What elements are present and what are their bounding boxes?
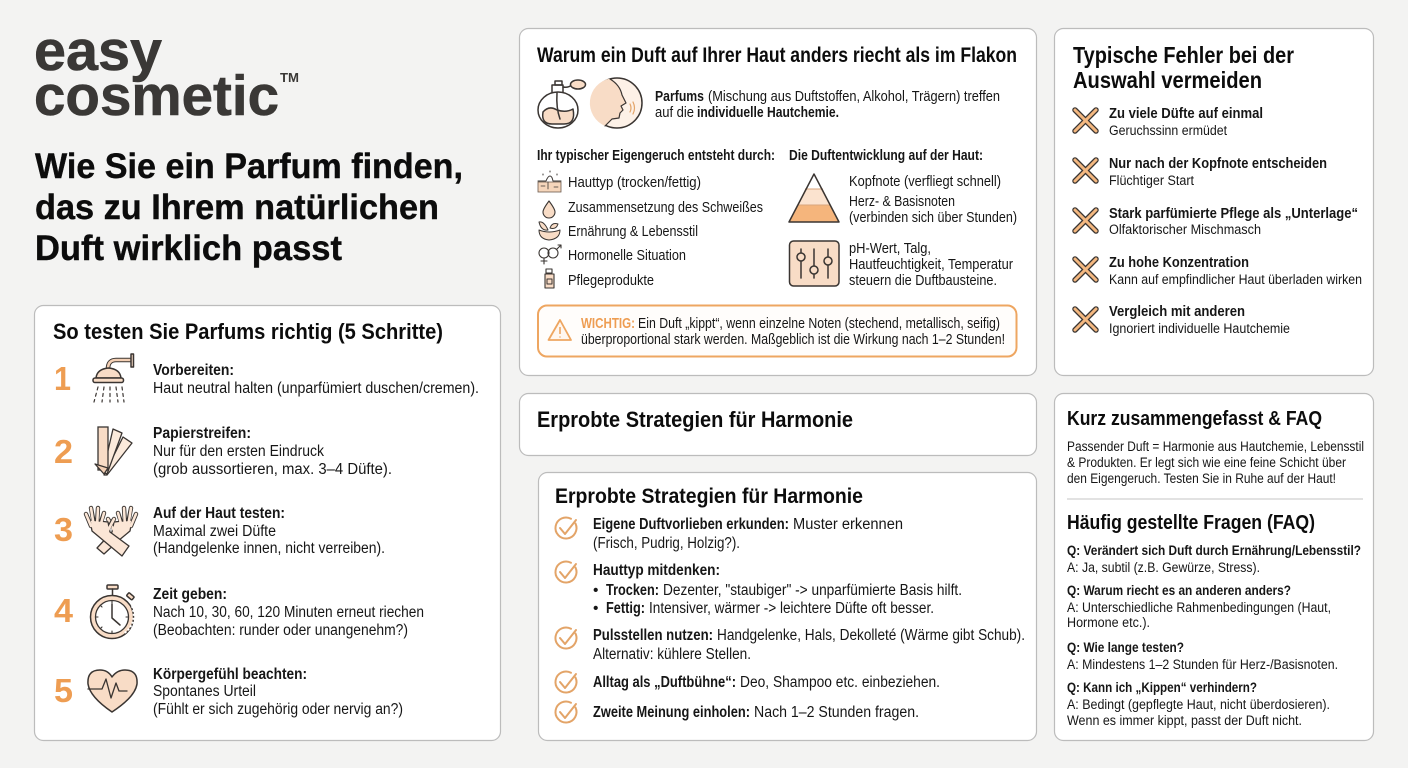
mistake 4: Kann auf empfindlicher Haut überladen wirken xyxy=(1109,272,1362,287)
panel: summary and FAQ xyxy=(1054,394,1374,740)
strategy 2: • xyxy=(593,582,598,599)
mistake 4 xyxy=(1075,255,1362,287)
step 3: 3 xyxy=(54,511,73,548)
icon: sliders xyxy=(790,241,839,286)
strategy 1: Eigene Duftvorlieben erkunden: xyxy=(593,516,789,533)
subheading: body odour: Ihr typischer Eigengeruch entsteht durch: xyxy=(537,148,775,164)
icon: cross xyxy=(1075,160,1096,181)
FAQ 4 xyxy=(1067,680,1330,728)
text: intro: Parfums xyxy=(655,89,704,105)
strategy 2: Intensiver, wärmer -> leichtere Düfte oft besser. xyxy=(649,600,934,617)
step 2 xyxy=(54,425,392,478)
FAQ 3: Q: Wie lange testen? xyxy=(1067,640,1184,655)
step 4: (Beobachten: runder oder unangenehm?) xyxy=(153,622,408,639)
main title: Wie Sie ein Parfum finden, xyxy=(35,147,463,186)
main title: Duft wirklich passt xyxy=(35,229,342,268)
icon: cross xyxy=(1075,259,1096,280)
step 5: (Fühlt er sich zugehörig oder nervig an?) xyxy=(153,701,403,718)
mistake 1 xyxy=(1075,106,1263,138)
strategy 2: Fettig: xyxy=(606,600,645,617)
main title: das zu Ihrem natürlichen xyxy=(35,188,439,227)
strategy 4: Deo, Shampoo etc. einbeziehen. xyxy=(740,674,940,691)
step 3 xyxy=(54,505,385,557)
FAQ 4: Wenn es immer kippt, passt der Duft nicht. xyxy=(1067,713,1302,728)
strategy 5: Nach 1–2 Stunden fragen. xyxy=(754,704,919,721)
heading: mistakes: Typische Fehler bei der xyxy=(1073,42,1294,68)
mistake 4: Zu hohe Konzentration xyxy=(1109,255,1249,271)
panel: strategies header: Erprobte Strategien für Harmonie xyxy=(537,407,853,432)
FAQ 1 xyxy=(1067,543,1361,575)
step 2: Nur für den ersten Eindruck xyxy=(153,443,324,460)
strategy 1 xyxy=(555,516,903,552)
icon: care product xyxy=(545,269,554,288)
icon: perfume bottle xyxy=(538,80,586,128)
icon: cross xyxy=(1075,210,1096,231)
mistake 5: Ignoriert individuelle Hautchemie xyxy=(1109,321,1290,336)
callout: important: WICHTIG: xyxy=(581,316,635,332)
mistake 2 xyxy=(1075,156,1327,188)
text: intro xyxy=(655,89,1000,121)
step 5: Spontanes Urteil xyxy=(153,683,256,700)
strategy 3: Alternativ: kühlere Stellen. xyxy=(593,646,751,663)
callout: important xyxy=(538,306,1016,356)
text: summary: & Produkten. Er legt sich wie eine feine Schicht über xyxy=(1067,455,1346,470)
strategy 2: Trocken: xyxy=(606,582,659,599)
scent development block: Hautfeuchtigkeit, Temperatur xyxy=(849,257,1013,273)
icon: food xyxy=(539,222,560,240)
list: body odour factors: Zusammensetzung des Schweißes xyxy=(568,200,763,216)
step 4 xyxy=(54,585,424,639)
panel: strategies xyxy=(538,472,1036,740)
icon: skin xyxy=(538,171,561,192)
icon: crossed hands xyxy=(86,508,136,556)
scent development block: Herz- & Basisnoten xyxy=(849,194,955,210)
logo: easy cosmetic: easy xyxy=(34,19,162,83)
icon: stopwatch xyxy=(90,585,134,638)
FAQ 4: Q: Kann ich „Kippen“ verhindern? xyxy=(1067,680,1257,695)
scent development block: pH-Wert, Talg, xyxy=(849,241,931,257)
icon: fragrance pyramid xyxy=(789,174,839,222)
mistake 3 xyxy=(1075,206,1358,237)
step 2: 2 xyxy=(54,433,73,470)
main title xyxy=(35,147,463,268)
mistake 2: Nur nach der Kopfnote entscheiden xyxy=(1109,156,1327,172)
list: body odour factors: Hauttyp (trocken/fettig) xyxy=(568,175,701,191)
text: intro: individuelle Hautchemie. xyxy=(697,105,839,121)
heading: summary: Kurz zusammengefasst & FAQ xyxy=(1067,408,1322,430)
icon: check xyxy=(555,562,576,583)
step 1: Haut neutral halten (unparfümiert duschen/cremen). xyxy=(153,380,479,397)
heading: strategies: Erprobte Strategien für Harmonie xyxy=(555,484,863,508)
FAQ 2: Q: Warum riecht es an anderen anders? xyxy=(1067,583,1291,598)
list: body odour factors: Hormonelle Situation xyxy=(568,248,686,264)
FAQ 3 xyxy=(1067,640,1338,672)
text: summary: den Eigengeruch. Testen Sie in Ruhe auf der Haut! xyxy=(1067,471,1336,486)
strategy 3 xyxy=(555,627,1025,663)
step 1: Vorbereiten: xyxy=(153,362,234,379)
step 1 xyxy=(54,354,479,402)
strategy 3: Pulsstellen nutzen: xyxy=(593,627,713,644)
heading: mistakes: Auswahl vermeiden xyxy=(1073,67,1262,93)
panel: 5 steps xyxy=(34,306,500,740)
heading: why: Warum ein Duft auf Ihrer Haut anders riecht als im Flakon xyxy=(537,44,1017,67)
mistake 5 xyxy=(1075,304,1290,336)
step 4: Zeit geben: xyxy=(153,586,227,603)
callout: important: Ein Duft „kippt“, wenn einzelne Noten (stechend, metallisch, seifig) xyxy=(638,316,1000,332)
step 2: Papierstreifen: xyxy=(153,425,251,442)
step 2: (grob aussortieren, max. 3–4 Düfte). xyxy=(153,461,392,478)
icon: cross xyxy=(1075,309,1096,330)
scent development block: Kopfnote (verfliegt schnell) xyxy=(849,174,1001,190)
mistake 3: Stark parfümierte Pflege als „Unterlage“ xyxy=(1109,206,1358,222)
mistake 3: Olfaktorischer Mischmasch xyxy=(1109,222,1261,237)
icon: drop xyxy=(543,201,555,218)
FAQ 2: A: Unterschiedliche Rahmenbedingungen (Haut, xyxy=(1067,600,1331,615)
strategy 5 xyxy=(555,702,919,723)
text: intro: (Mischung aus Duftstoffen, Alkohol, Trägern) treffen xyxy=(708,89,1000,105)
text: summary xyxy=(1067,439,1364,486)
panel: typical mistakes xyxy=(1054,28,1374,376)
list: body odour factors: Pflegeprodukte xyxy=(568,273,654,289)
icon: heart with pulse xyxy=(88,670,137,712)
mistake 2: Flüchtiger Start xyxy=(1109,173,1194,188)
logo: easy cosmetic: cosmetic xyxy=(34,64,279,128)
step 3: Auf der Haut testen: xyxy=(153,505,285,522)
heading: mistakes xyxy=(1073,42,1294,93)
step 4: 4 xyxy=(54,592,74,629)
strategy 4 xyxy=(555,672,940,693)
strategy 3: Handgelenke, Hals, Dekolleté (Wärme gibt Schub). xyxy=(717,627,1025,644)
step 1: 1 xyxy=(54,360,71,397)
mistake 1: Zu viele Düfte auf einmal xyxy=(1109,106,1263,122)
icon: check xyxy=(555,672,576,693)
icon: cross xyxy=(1075,110,1096,131)
heading: FAQ: Häufig gestellte Fragen (FAQ) xyxy=(1067,512,1315,534)
step 3: Maximal zwei Düfte xyxy=(153,523,276,540)
strategy 2: Dezenter, "staubiger" -> unparfümierte Basis hilft. xyxy=(663,582,962,599)
step 5: 5 xyxy=(54,672,73,709)
step 5 xyxy=(54,666,403,718)
text: intro: auf die xyxy=(655,105,694,121)
icon: check xyxy=(555,518,576,539)
icon: shower xyxy=(93,354,134,402)
strategy 1: (Frisch, Pudrig, Holzig?). xyxy=(593,535,740,552)
scent development block: steuern die Duftbausteine. xyxy=(849,273,997,289)
icon: paper strips xyxy=(95,427,132,475)
strategy 4: Alltag als „Duftbühne“: xyxy=(593,674,736,691)
logo: easy cosmetic: TM xyxy=(280,70,299,85)
step 3: (Handgelenke innen, nicht verreiben). xyxy=(153,540,385,557)
strategy 5: Zweite Meinung einholen: xyxy=(593,704,750,721)
strategy 2: Hauttyp mitdenken: xyxy=(593,562,720,579)
logo: easy cosmetic xyxy=(34,19,299,128)
heading: steps: So testen Sie Parfums richtig (5 Schritte) xyxy=(53,319,443,344)
FAQ 1: Q: Verändert sich Duft durch Ernährung/Lebensstil? xyxy=(1067,543,1361,558)
step 5: Körpergefühl beachten: xyxy=(153,666,307,683)
FAQ 2 xyxy=(1067,583,1331,630)
scent development block xyxy=(789,174,1017,289)
mistake 1: Geruchssinn ermüdet xyxy=(1109,123,1227,138)
strategy 2 xyxy=(555,562,962,617)
panel: strategies header xyxy=(520,394,1036,456)
subheading: scent development: Die Duftentwicklung auf der Haut: xyxy=(789,148,983,164)
list: body odour factors xyxy=(538,171,763,289)
mistake 5: Vergleich mit anderen xyxy=(1109,304,1245,320)
icon: check xyxy=(555,628,576,649)
FAQ 1: A: Ja, subtil (z.B. Gewürze, Stress). xyxy=(1067,560,1260,575)
icon: gender symbols xyxy=(539,245,561,264)
icon: check xyxy=(555,702,576,723)
text: summary: Passender Duft = Harmonie aus Hautchemie, Lebensstil xyxy=(1067,439,1364,454)
strategy 1: Muster erkennen xyxy=(793,516,903,533)
list: body odour factors: Ernährung & Lebensstil xyxy=(568,224,698,240)
FAQ 2: Hormone etc.). xyxy=(1067,615,1150,630)
panel: why scent differs on skin xyxy=(520,28,1036,376)
strategy 2: • xyxy=(593,600,598,617)
icon: warning triangle xyxy=(548,320,571,340)
FAQ 3: A: Mindestens 1–2 Stunden für Herz-/Basisnoten. xyxy=(1067,657,1338,672)
FAQ 4: A: Bedingt (gepflegte Haut, nicht überdosieren). xyxy=(1067,697,1330,712)
callout: important: überproportional stark werden. Maßgeblich ist die Wirkung nach 1–2 Stunden! xyxy=(581,332,1005,348)
icon: face smelling xyxy=(590,78,642,128)
scent development block: (verbinden sich über Stunden) xyxy=(849,210,1017,226)
step 4: Nach 10, 30, 60, 120 Minuten erneut riechen xyxy=(153,604,424,621)
